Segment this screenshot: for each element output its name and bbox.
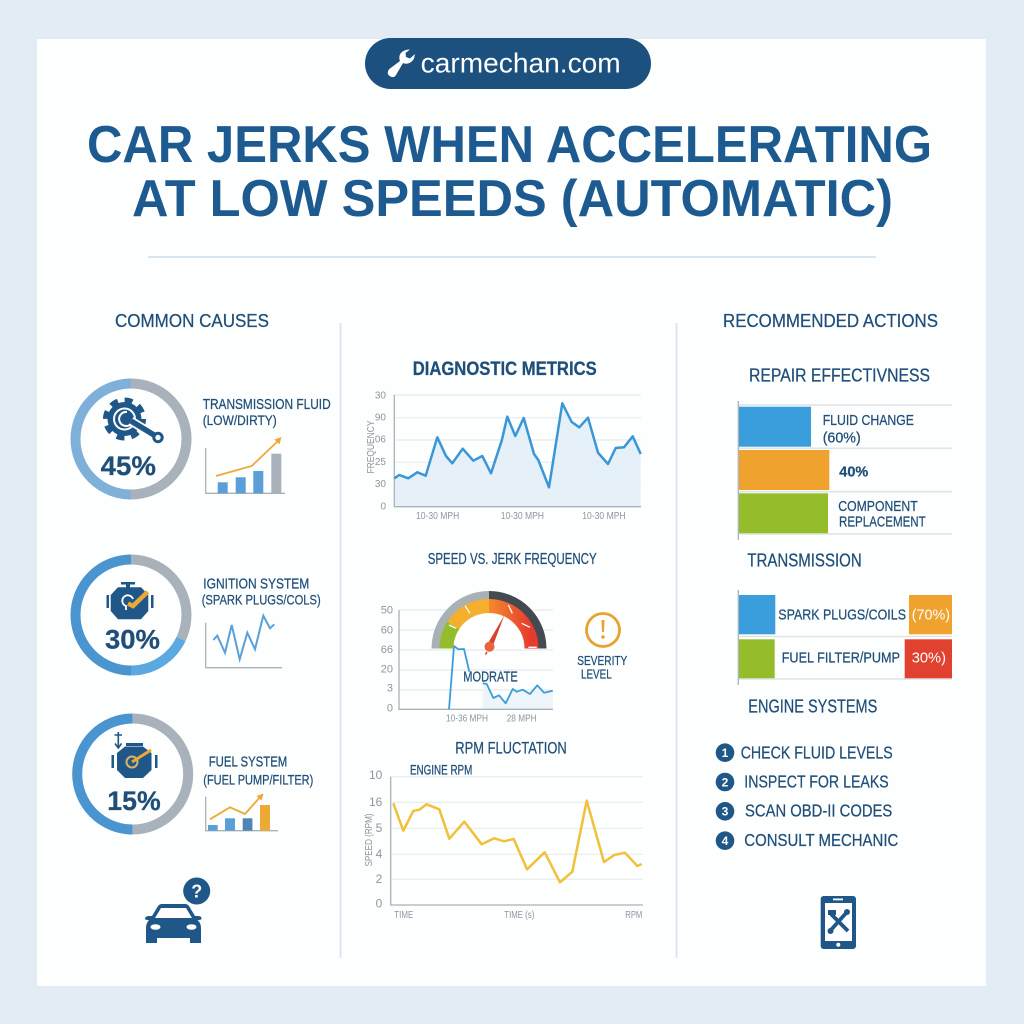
heading: transmission: TRANSMISSION xyxy=(747,551,862,571)
gauge label: MODRATE xyxy=(463,668,518,685)
cause: fuel system xyxy=(77,718,313,831)
cause: transmission fluid: 45% xyxy=(101,451,156,481)
icon: gear and wrench xyxy=(106,400,162,442)
chart: speed vs jerk with gauge: 66 xyxy=(381,644,393,656)
chart: frequency line chart: 10-30 MPH xyxy=(416,511,459,522)
numbered action list: 2 xyxy=(722,775,729,789)
chart: engine rpm line chart: ENGINE RPM xyxy=(410,762,472,777)
title xyxy=(87,116,932,228)
numbered action list: 3 xyxy=(722,805,729,819)
numbered action list: CHECK FLUID LEVELS xyxy=(741,742,893,762)
chart: engine rpm line chart: 0 xyxy=(376,897,383,911)
chart: engine rpm line chart: 16 xyxy=(369,795,383,809)
icon: car with question mark xyxy=(145,878,210,943)
mini bar chart xyxy=(206,437,285,493)
chart: engine rpm line chart: 5 xyxy=(376,821,383,835)
chart: engine rpm line chart: TIME (s) xyxy=(504,910,534,921)
heading: diagnostic metrics: DIAGNOSTIC METRICS xyxy=(413,359,597,380)
cause: transmission fluid: (LOW/DIRTY) xyxy=(203,412,277,428)
chart: engine rpm line chart: TIME xyxy=(394,910,414,921)
bar chart: engine system repairs: 30%) xyxy=(912,650,946,667)
mini line chart xyxy=(206,616,282,668)
cause: fuel system: 15% xyxy=(107,786,161,816)
chart: speed vs jerk with gauge xyxy=(381,596,553,725)
title: CAR JERKS WHEN ACCELERATING xyxy=(87,116,932,174)
chart: engine rpm line chart: RPM xyxy=(625,910,642,921)
bar chart: engine system repairs xyxy=(738,590,952,685)
chart: speed vs jerk with gauge: 3 xyxy=(387,683,393,695)
chart: frequency line chart xyxy=(366,390,641,522)
severity level indicator: LEVEL xyxy=(581,666,612,681)
cause: fuel system: (FUEL PUMP/FILTER) xyxy=(203,771,313,787)
bar chart: transmission repairs: REPLACEMENT xyxy=(839,514,926,531)
ring chart 45% xyxy=(76,384,186,494)
cause: transmission fluid xyxy=(76,384,331,494)
chart: frequency line chart: 10-30 MPH xyxy=(582,511,626,522)
chart: speed vs jerk with gauge: 60 xyxy=(381,624,393,636)
chart: engine rpm line chart: 10 xyxy=(369,768,383,782)
chart: frequency line chart: 0 xyxy=(380,501,386,512)
chart: frequency line chart: FREQUENCY xyxy=(366,420,377,474)
mini bar chart xyxy=(206,794,278,831)
ring chart 30% xyxy=(76,560,186,670)
bar chart: engine system repairs: FUEL FILTER/PUMP xyxy=(782,650,900,667)
logo pill: carmechan.com xyxy=(421,48,621,79)
chart: speed vs jerk with gauge: 10-36 MPH xyxy=(446,713,488,725)
icon: phone with tools xyxy=(821,896,856,949)
icon: engine with spark check xyxy=(106,582,154,619)
bar chart: transmission repairs xyxy=(738,401,952,540)
cause: ignition system xyxy=(76,560,321,670)
bar chart: transmission repairs: COMPONENT xyxy=(838,498,918,515)
logo pill xyxy=(365,38,651,89)
severity level indicator xyxy=(577,614,628,681)
chart: frequency line chart: 10-30 MPH xyxy=(501,511,544,522)
cause: transmission fluid: TRANSMISSION FLUID xyxy=(203,397,331,413)
severity level indicator: SEVERITY xyxy=(577,653,628,668)
bar chart: transmission repairs: FLUID CHANGE xyxy=(823,412,914,429)
numbered action list: CONSULT MECHANIC xyxy=(744,830,898,850)
chart: frequency line chart: .06 xyxy=(372,435,386,446)
heading: common causes: COMMON CAUSES xyxy=(115,311,269,331)
cause: ignition system: (SPARK PLUGS/COLS) xyxy=(202,591,321,607)
chart: engine rpm line chart: 2 xyxy=(376,872,383,886)
icon: car with question mark: ? xyxy=(191,882,202,902)
cause: ignition system: IGNITION SYSTEM xyxy=(203,576,309,592)
bar chart: transmission repairs: 40% xyxy=(839,464,868,481)
ring chart 15% xyxy=(77,718,188,830)
chart: engine rpm line chart xyxy=(364,762,643,921)
heading: engine systems: ENGINE SYSTEMS xyxy=(748,697,877,717)
bar chart: engine system repairs: SPARK PLUGS/COILS xyxy=(778,606,906,623)
numbered action list: SCAN OBD-II CODES xyxy=(745,801,892,821)
title: AT LOW SPEEDS (AUTOMATIC) xyxy=(132,170,893,228)
bar chart: transmission repairs: (60%) xyxy=(823,430,861,447)
chart: engine rpm line chart: SPEED (RPM) xyxy=(364,814,375,866)
chart: engine rpm line chart: 4 xyxy=(376,847,383,861)
icon: engine with fuel arrow xyxy=(112,732,158,778)
gauge xyxy=(436,596,542,654)
numbered action list xyxy=(716,742,898,850)
chart: speed vs jerk with gauge: 20 xyxy=(381,664,393,676)
chart: speed vs jerk with gauge: 0 xyxy=(387,703,393,715)
chart: speed vs jerk with gauge: 28 MPH xyxy=(507,713,537,725)
chart: frequency line chart: 90 xyxy=(375,412,386,423)
chart: frequency line chart: 25 xyxy=(375,457,386,468)
heading: recommended actions: RECOMMENDED ACTIONS xyxy=(723,311,938,331)
cause: fuel system: FUEL SYSTEM xyxy=(209,755,287,771)
chart: frequency line chart: 30 xyxy=(375,390,386,401)
heading: repair effectiveness: REPAIR EFFECTIVNESS xyxy=(749,366,930,386)
numbered action list: 4 xyxy=(722,834,729,848)
chart: speed vs jerk with gauge: 50 xyxy=(381,604,393,616)
chart: frequency line chart: 30 xyxy=(375,479,386,490)
numbered action list: INSPECT FOR LEAKS xyxy=(744,772,889,792)
cause: ignition system: 30% xyxy=(105,624,160,654)
heading: speed vs jerk frequency: SPEED VS. JERK FREQUENCY xyxy=(428,551,597,568)
bar chart: engine system repairs: (70%) xyxy=(912,606,950,623)
numbered action list: 1 xyxy=(722,746,729,760)
heading: rpm fluctuation: RPM FLUCTATION xyxy=(455,738,567,757)
